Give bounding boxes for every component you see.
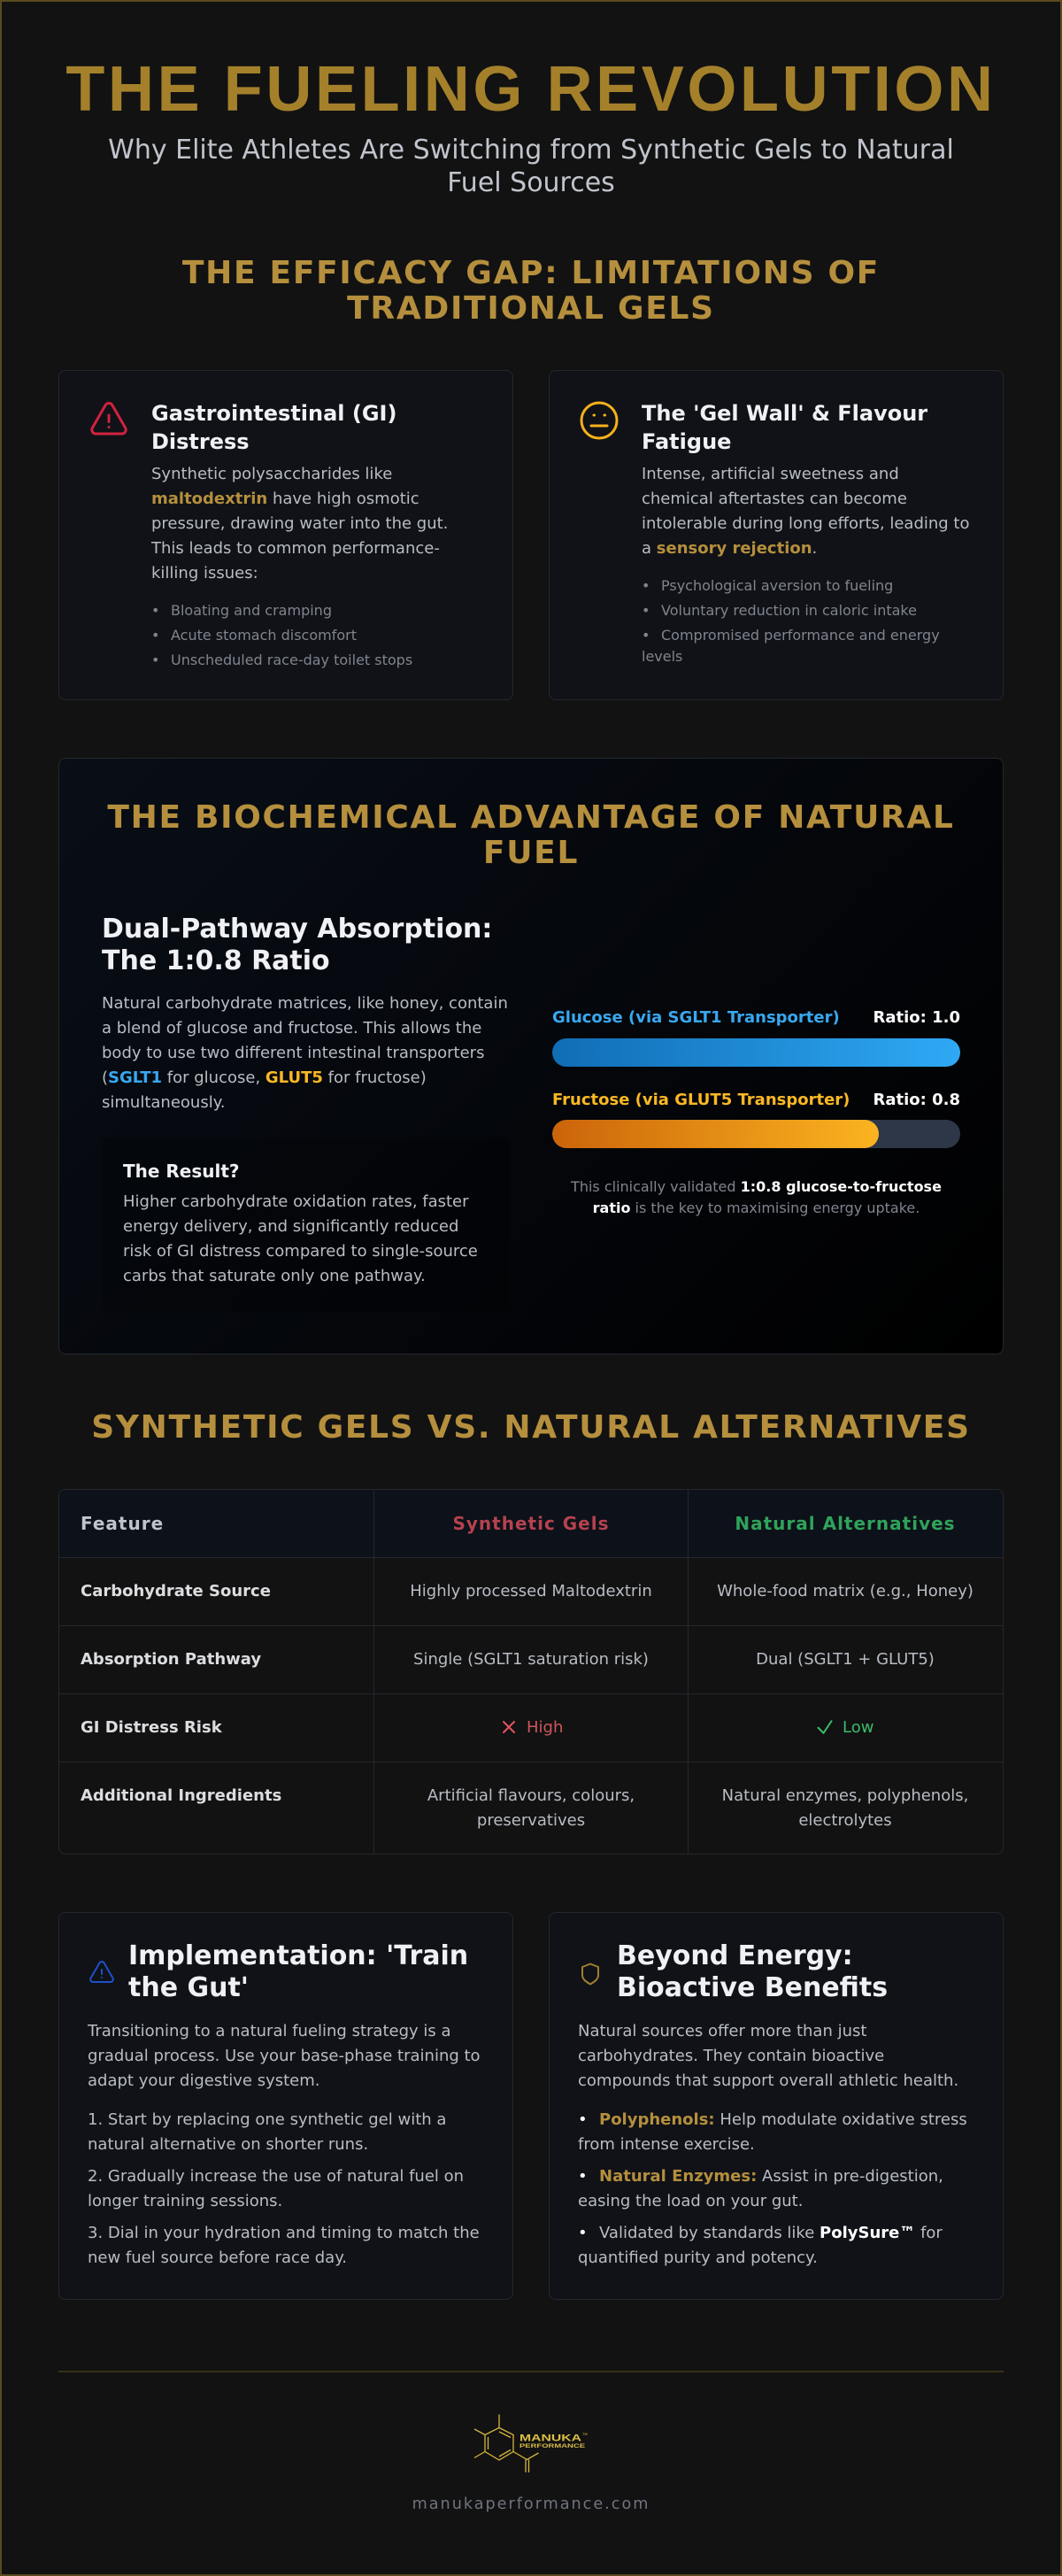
intro text: Transitioning to a natural fueling strategy is a [88, 2022, 451, 2040]
cell: synthetic ingredients: Artificial flavours, colours, [427, 1786, 635, 1805]
cell: low risk [818, 1718, 873, 1737]
heading: comparison: SYNTHETIC GELS VS. NATURAL ALTERNATIVES [91, 1409, 971, 1446]
glucose ratio: Ratio: 1.0 [873, 1008, 960, 1027]
fructose ratio: Ratio: 0.8 [873, 1091, 960, 1109]
table header row [59, 1490, 1003, 1557]
symptom list [151, 602, 412, 668]
cell: natural ingredients: Natural enzymes, polyphenols, [722, 1786, 968, 1805]
comparison table [58, 1489, 1004, 1855]
panel: implementation [58, 1912, 513, 2300]
card heading: Fatigue [642, 429, 731, 454]
body text: dual pathway: simultaneously. [102, 1093, 225, 1112]
effects list: Psychological aversion to fueling [661, 577, 893, 594]
footer divider [58, 2371, 1004, 2372]
card heading: Gastrointestinal (GI) [151, 401, 396, 426]
benefits list: quantified purity and potency. [578, 2248, 818, 2267]
body text: dual pathway: body to use two different intestinal transporters [102, 1044, 484, 1062]
callout text: Higher carbohydrate oxidation rates, faster [123, 1192, 469, 1211]
heading: efficacy gap: THE EFFICACY GAP: LIMITATIONS OF [182, 255, 880, 291]
logo: manuka performance: TM [582, 2432, 588, 2436]
benefits list: from intense exercise. [578, 2135, 755, 2154]
numbered steps: natural alternative on shorter runs. [88, 2135, 368, 2154]
body text: dual pathway: a blend of glucose and fructose. This allows the [102, 1019, 481, 1037]
benefits list [578, 2110, 967, 2267]
callout heading: The Result? [123, 1161, 240, 1182]
benefits list: • [578, 2110, 588, 2129]
effects list: • [642, 577, 650, 594]
chart caption: This clinically validated 1:0.8 glucose-to-fructose [571, 1178, 942, 1195]
panel: beyond energy [549, 1912, 1004, 2300]
row label: GI distress risk: GI Distress Risk [81, 1718, 222, 1737]
logo: manuka performance: MANUKA [519, 2433, 581, 2443]
effects list: levels [642, 648, 682, 665]
callout text: energy delivery, and significantly reduced [123, 1217, 458, 1236]
card body text: Intense, artificial sweetness and [642, 465, 899, 483]
callout text: risk of GI distress compared to single-source [123, 1242, 478, 1261]
card body text: Synthetic polysaccharides like [151, 465, 392, 483]
body text: dual pathway: Natural carbohydrate matrices, like honey, contain [102, 994, 508, 1013]
chart: glucose bar [552, 1008, 960, 1067]
card body text: a sensory rejection. [642, 539, 817, 558]
chart: fructose bar [552, 1091, 960, 1148]
chart caption [570, 1178, 942, 1216]
card body text [642, 465, 970, 558]
effects list: Compromised performance and energy [661, 627, 940, 644]
heading: efficacy gap: TRADITIONAL GELS [347, 290, 715, 327]
cell: synthetic ingredients [427, 1786, 635, 1830]
icon: shield [581, 1963, 599, 1985]
intro text: adapt your digestive system. [88, 2071, 320, 2090]
panel: gel wall and flavour fatigue [549, 370, 1004, 700]
heading: biochemical advantage: FUEL [483, 835, 579, 871]
cell: natural pathway: Dual (SGLT1 + GLUT5) [756, 1650, 935, 1669]
effects list: • [642, 602, 650, 619]
symptom list: Bloating and cramping [171, 602, 332, 619]
header: synthetic gels: Synthetic Gels [452, 1513, 610, 1534]
cell: high risk [503, 1718, 563, 1737]
header: feature: Feature [81, 1513, 164, 1534]
subtitle: Why Elite Athletes Are Switching from Synthetic Gels to Natural [108, 135, 954, 166]
symptom list: • [151, 652, 159, 668]
cell: natural ingredients [722, 1786, 968, 1830]
intro text: carbohydrates. They contain bioactive [578, 2047, 884, 2065]
intro text: Natural sources offer more than just [578, 2022, 866, 2040]
card heading [128, 1940, 468, 2003]
cell: low risk: Low [843, 1718, 873, 1737]
icon: neutral face [581, 402, 618, 439]
numbered steps: longer training sessions. [88, 2192, 282, 2210]
icon: cross [503, 1721, 515, 1733]
card heading: The 'Gel Wall' & Flavour [642, 401, 927, 426]
logo: manuka performance: PERFORMANCE [519, 2443, 586, 2449]
sub-heading: dual pathway [102, 914, 492, 976]
intro text: compounds that support overall athletic health. [578, 2071, 958, 2090]
sub-heading: dual pathway: Dual-Pathway Absorption: [102, 914, 492, 945]
fructose label: Fructose (via GLUT5 Transporter) [552, 1091, 850, 1109]
row label: additional ingredients: Additional Ingredients [81, 1786, 281, 1805]
callout text: carbs that saturate only one pathway. [123, 1267, 426, 1285]
row label: carbohydrate source: Carbohydrate Source [81, 1582, 271, 1600]
callout: the result [102, 1138, 509, 1311]
card heading: Bioactive Benefits [617, 1972, 888, 2003]
benefits list: Polyphenols: Help modulate oxidative stress [599, 2110, 967, 2129]
symptom list: Unscheduled race-day toilet stops [171, 652, 412, 668]
cell: synthetic source: Highly processed Maltodextrin [410, 1582, 652, 1600]
cell: synthetic ingredients: preservatives [477, 1811, 585, 1830]
benefits list: Natural Enzymes: Assist in pre-digestion, [599, 2167, 943, 2186]
logo: manuka performance [474, 2415, 588, 2472]
subtitle [108, 135, 954, 198]
cell: natural ingredients: electrolytes [798, 1811, 892, 1830]
numbered steps [88, 2110, 480, 2267]
card body text: intolerable during long efforts, leading to [642, 514, 970, 533]
heading: biochemical advantage [107, 799, 955, 871]
symptom list: Acute stomach discomfort [171, 627, 357, 644]
numbered steps: 1. Start by replacing one synthetic gel with a [88, 2110, 446, 2129]
benefits list: easing the load on your gut. [578, 2192, 803, 2210]
sub-heading: dual pathway: The 1:0.8 Ratio [102, 945, 330, 976]
footer url: manukaperformance.com [412, 2495, 650, 2513]
effects list: Voluntary reduction in caloric intake [661, 602, 917, 619]
symptom list: • [151, 602, 159, 619]
symptom list: • [151, 627, 159, 644]
subtitle: Fuel Sources [447, 167, 615, 198]
chart caption: ratio is the key to maximising energy uptake. [593, 1199, 920, 1216]
row label: absorption pathway: Absorption Pathway [81, 1650, 261, 1669]
cell: high risk: High [527, 1718, 563, 1737]
heading: biochemical advantage: THE BIOCHEMICAL ADVANTAGE OF NATURAL [107, 799, 955, 836]
cell: synthetic pathway: Single (SGLT1 saturation risk) [413, 1650, 649, 1669]
card body text: chemical aftertastes can become [642, 490, 907, 508]
fructose bar track [552, 1120, 960, 1148]
card heading [151, 401, 396, 454]
card heading: Beyond Energy: [617, 1940, 853, 1971]
benefits list: • [578, 2224, 588, 2242]
card heading: Implementation: 'Train [128, 1940, 468, 1971]
card heading: the Gut' [128, 1972, 249, 2003]
numbered steps: new fuel source before race day. [88, 2248, 347, 2267]
fructose bar fill [552, 1120, 879, 1148]
benefits list: Validated by standards like PolySure™ for [599, 2224, 943, 2242]
card body text [150, 465, 448, 582]
body text: dual pathway [102, 994, 508, 1112]
numbered steps: 3. Dial in your hydration and timing to match the [88, 2224, 480, 2242]
card body text: maltodextrin have high osmotic [151, 490, 419, 508]
card heading: Distress [151, 429, 250, 454]
numbered steps: 2. Gradually increase the use of natural fuel on [88, 2167, 464, 2186]
card body text: This leads to common performance- [151, 539, 440, 558]
card heading [642, 401, 927, 454]
glucose bar fill [552, 1038, 960, 1067]
benefits list: • [578, 2167, 588, 2186]
effects list [642, 577, 940, 665]
panel: gastrointestinal distress [58, 370, 513, 700]
card heading [617, 1940, 888, 2003]
icon: blue warning triangle [89, 1961, 114, 1983]
intro text [578, 2022, 958, 2090]
callout text [123, 1192, 478, 1285]
card body text: pressure, drawing water into the gut. [151, 514, 448, 533]
icon: warning triangle [90, 402, 127, 436]
title: THE FUELING REVOLUTION [65, 54, 997, 125]
effects list: • [642, 627, 650, 644]
icon: check [818, 1720, 832, 1734]
body text: dual pathway: (SGLT1 for glucose, GLUT5 for fructose) [102, 1068, 427, 1087]
card body text: killing issues: [151, 564, 258, 582]
header: natural alternatives: Natural Alternatives [735, 1513, 956, 1534]
heading: efficacy gap [182, 255, 880, 327]
panel: biochemical advantage [58, 758, 1004, 1354]
cell: natural source: Whole-food matrix (e.g., Honey) [717, 1582, 974, 1600]
intro text [87, 2022, 481, 2090]
intro text: gradual process. Use your base-phase training to [88, 2047, 481, 2065]
glucose label: Glucose (via SGLT1 Transporter) [552, 1008, 840, 1027]
